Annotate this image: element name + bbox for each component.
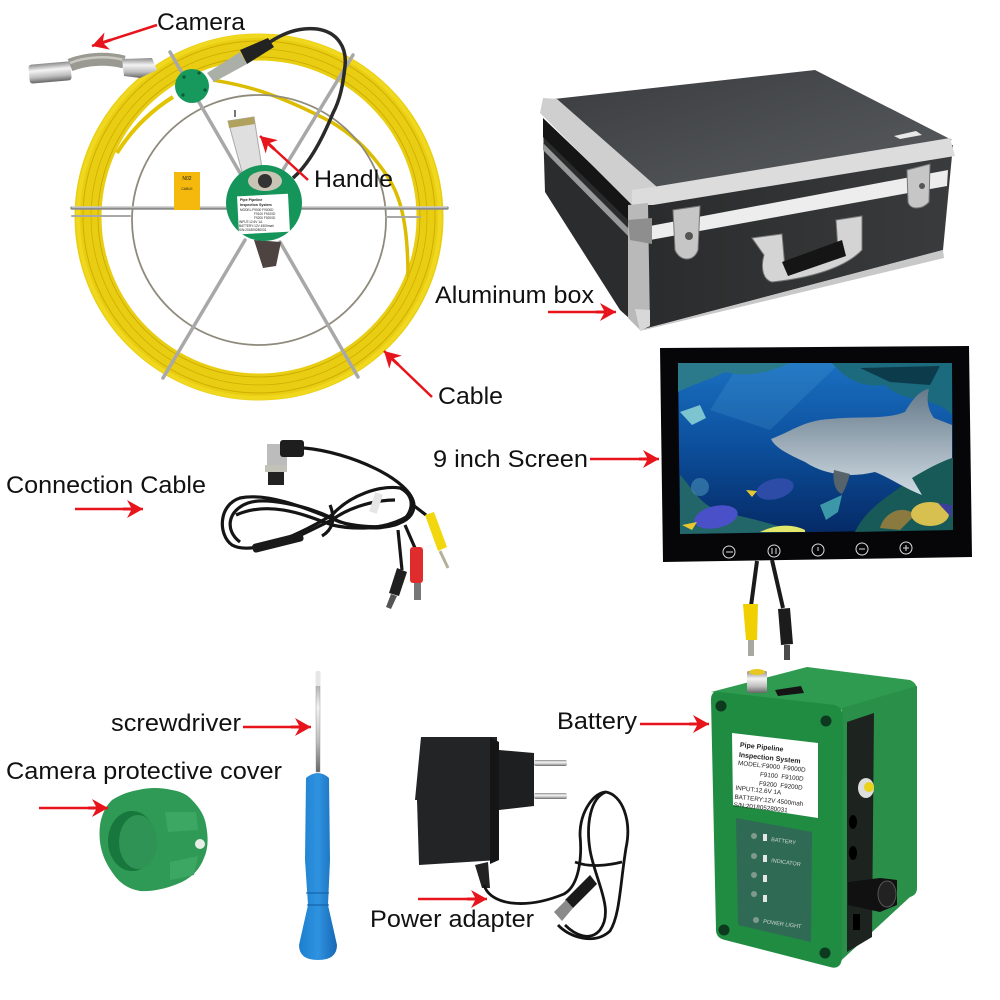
control buttons [723, 542, 912, 558]
coral top [678, 363, 790, 392]
red plug [410, 547, 423, 600]
screwdriver [299, 672, 337, 960]
black plug [386, 568, 407, 609]
indicator panel: BATTERY [771, 837, 797, 846]
green hub with label: F9100 F9100D [254, 212, 276, 216]
arrow: camera [92, 25, 157, 46]
black lead cable [207, 29, 345, 178]
indicator panel: INDICATOR [771, 858, 801, 868]
yellow tag: CABLE [181, 187, 193, 191]
monitor bezel [660, 346, 972, 562]
white sticker [894, 131, 922, 139]
arrow: connection cable [75, 508, 143, 510]
9 inch screen [660, 346, 972, 660]
front face [711, 692, 843, 968]
arrow: cable [384, 351, 432, 397]
indicator panel [736, 818, 812, 942]
indicator panel: POWER LIGHT [763, 919, 802, 930]
label: camera: Camera [157, 9, 246, 36]
connector head [265, 440, 304, 485]
power cord loop [484, 792, 628, 939]
handle [228, 110, 281, 268]
info label: BATTERY:12V 4500mah [734, 794, 804, 808]
camera protective cover [100, 788, 208, 891]
coiled black cable [222, 448, 426, 570]
label: camera protective cover: Camera protective cover [6, 758, 282, 785]
dolphin [771, 389, 952, 495]
right side [833, 686, 917, 968]
green hub with label [226, 165, 302, 241]
arrow: aluminum box [548, 311, 616, 313]
arrow: 9 inch screen [590, 458, 659, 460]
info label [732, 733, 818, 818]
label: connection cable: Connection Cable [6, 472, 206, 499]
light rays [710, 363, 840, 430]
strain relief [475, 862, 490, 888]
info label: S/N:201805280031 [733, 802, 789, 814]
label: power adapter: Power adapter [370, 906, 534, 933]
info label: Inspection System [739, 752, 801, 765]
green hub with label: S/N:201805280031 [239, 228, 267, 232]
yellow tag: N02 [182, 176, 192, 182]
RCA socket [747, 669, 804, 696]
arrow: camera protective cover [39, 807, 108, 809]
small green hub [175, 69, 209, 103]
yellow plug [425, 512, 448, 568]
label: handle: Handle [314, 166, 393, 193]
screw holes [716, 700, 832, 958]
arrow: power adapter [418, 898, 487, 900]
cable reel [28, 29, 447, 398]
green hub with label: BATTERY:12V 4500mah [239, 224, 274, 228]
display [678, 363, 953, 534]
steel spokes [72, 52, 447, 378]
video and power leads [743, 560, 793, 660]
info label: INPUT:12.6V 1A [735, 785, 782, 797]
info label: MODEL:F9000 F9000D [738, 760, 806, 774]
box front [632, 145, 953, 330]
power adapter [415, 737, 628, 939]
adapter body [415, 737, 499, 865]
label: battery: Battery [557, 708, 637, 735]
info label: F9100 F9100D [760, 771, 804, 783]
arrow: handle [260, 136, 308, 180]
green hub with label: INPUT:12.6V 1A [239, 220, 263, 224]
box lid [545, 70, 952, 198]
top face [711, 667, 917, 710]
battery unit [711, 667, 917, 968]
shaft [316, 672, 320, 772]
white tag [369, 492, 383, 514]
aluminum trim [540, 98, 657, 205]
green hub with label: F9200 F9200D [254, 216, 276, 220]
plug base and pins [499, 750, 534, 810]
box left side [543, 125, 640, 328]
info label: F9200 F9200D [759, 780, 803, 792]
info label: Pipe Pipeline [740, 742, 784, 754]
yellow tag [174, 172, 200, 210]
side port strip [847, 713, 897, 952]
yellow coiled cable [78, 36, 440, 398]
green hub with label: MODEL:F9000 F9000D [240, 208, 274, 212]
arrow: screwdriver [243, 726, 311, 728]
latches [673, 164, 930, 259]
label: cable: Cable [438, 383, 503, 410]
inner steel ring [132, 95, 386, 345]
coral bottom [680, 475, 800, 534]
label: aluminum box: Aluminum box [435, 282, 594, 309]
camera head [28, 57, 157, 84]
arrow: battery [640, 723, 709, 725]
label: 9 inch screen: 9 inch Screen [433, 446, 588, 473]
handle [299, 773, 337, 960]
carry handle [752, 216, 862, 282]
green hub with label: Pipe Pipeline [240, 198, 262, 202]
tropical fish [680, 405, 952, 532]
label: screwdriver: screwdriver [111, 710, 241, 737]
DC connector [565, 875, 597, 908]
green hub with label: Inspection System [240, 203, 272, 207]
connection cable [222, 440, 448, 609]
aluminum box [540, 70, 955, 331]
